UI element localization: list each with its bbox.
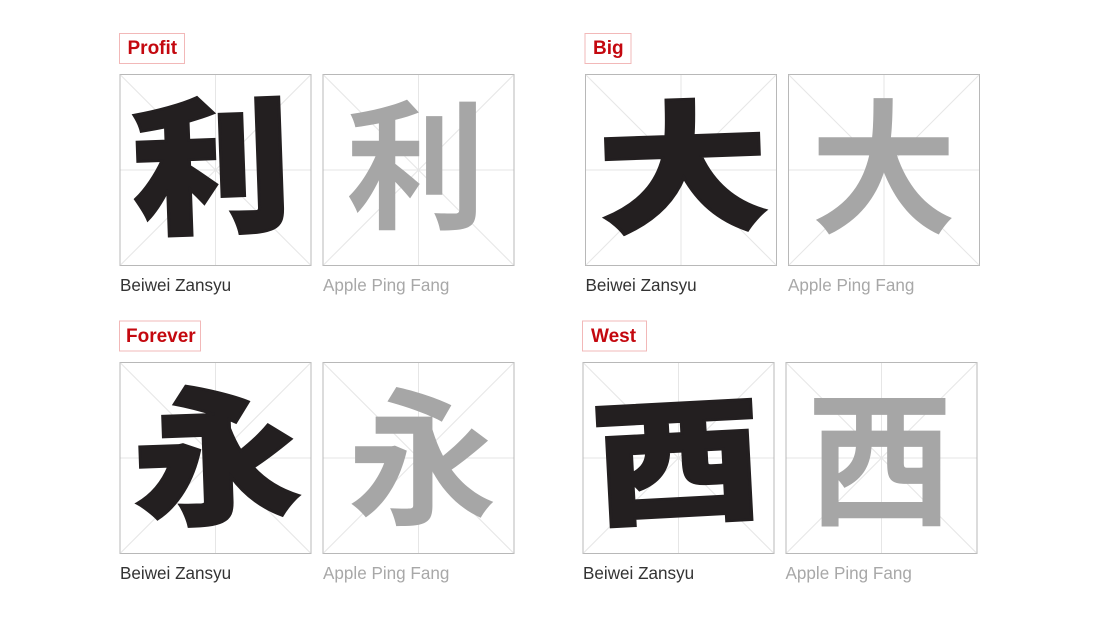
caption: Apple Ping Fang: Apple Ping Fang — [323, 564, 449, 583]
caption: Apple Ping Fang: Apple Ping Fang — [788, 276, 914, 295]
label: West: West — [591, 326, 637, 347]
specimen: Apple Ping Fang profit character: 利 — [346, 91, 486, 248]
specimen: Beiwei Zansyu west character: 西 — [589, 386, 766, 545]
specimen: Beiwei Zansyu forever character: 永 — [130, 374, 303, 546]
specimen: Apple Ping Fang big character: 大 — [810, 90, 956, 253]
panel: Big — [585, 34, 980, 295]
specimen: Apple Ping Fang west character — [786, 362, 977, 554]
panel: Forever — [120, 321, 514, 583]
label: Profit: Profit — [128, 38, 178, 59]
label: Forever — [120, 321, 200, 351]
caption: Beiwei Zansyu: Beiwei Zansyu — [120, 564, 231, 583]
specimen: Apple Ping Fang west character: 西 — [807, 382, 953, 545]
label: Big — [585, 34, 631, 64]
caption: Beiwei Zansyu: Beiwei Zansyu — [586, 276, 697, 295]
caption: Apple Ping Fang: Apple Ping Fang — [323, 276, 449, 295]
specimen: Apple Ping Fang big character — [788, 74, 980, 266]
specimen: Apple Ping Fang forever character — [323, 362, 514, 554]
specimen: Apple Ping Fang forever character: 永 — [348, 378, 496, 545]
label: Profit — [120, 34, 184, 64]
specimen: Apple Ping Fang profit character — [323, 74, 514, 266]
specimen: Beiwei Zansyu profit character: 利 — [129, 88, 294, 255]
panel: Profit — [120, 34, 514, 295]
caption: Apple Ping Fang: Apple Ping Fang — [786, 564, 912, 583]
caption: Beiwei Zansyu: Beiwei Zansyu — [120, 276, 231, 295]
specimen: Beiwei Zansyu big character: 大 — [595, 90, 771, 253]
label: Big: Big — [593, 38, 624, 59]
panel: West — [582, 321, 977, 583]
label: Forever: Forever — [126, 326, 196, 347]
label: West — [582, 321, 646, 351]
caption: Beiwei Zansyu: Beiwei Zansyu — [583, 564, 694, 583]
